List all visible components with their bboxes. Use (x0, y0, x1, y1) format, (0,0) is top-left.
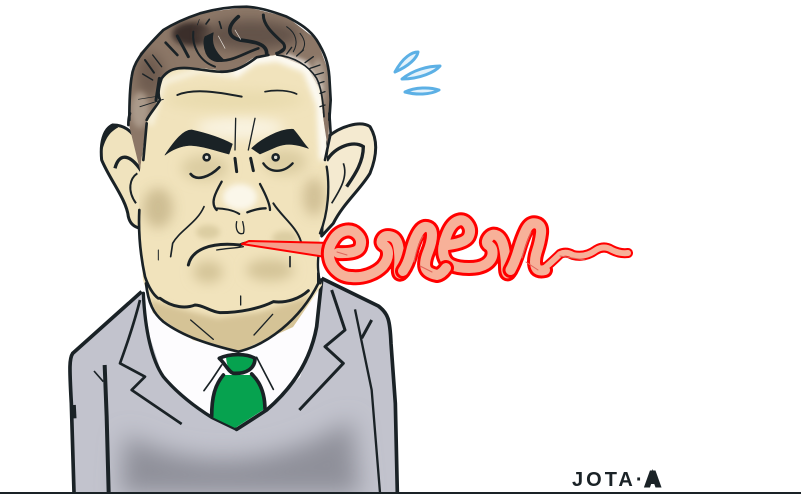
eyebrows (165, 130, 232, 155)
nasolabial (171, 207, 204, 257)
tail fill (540, 248, 628, 272)
signature: JOTA·A (572, 469, 660, 491)
hair side strands (128, 113, 147, 160)
hair line art (129, 7, 331, 120)
glabella lines (233, 118, 238, 150)
first e and first n stem (329, 230, 403, 277)
mouth (188, 242, 287, 265)
second e and second n stem (443, 220, 510, 273)
face outline left and jaw (139, 210, 158, 298)
face outline right (318, 167, 328, 283)
face (139, 55, 330, 356)
shading patches (143, 188, 173, 228)
jaw and neck lines (146, 273, 318, 352)
tail (540, 248, 628, 272)
suit jacket (70, 278, 398, 494)
hair (129, 7, 330, 170)
bottom border line (0, 492, 801, 494)
second n arch (510, 223, 545, 270)
sweat drops (395, 52, 440, 94)
left ear (100, 123, 145, 228)
green tie (212, 353, 265, 428)
neck shadow (150, 296, 310, 356)
ribbon fold marks (337, 232, 585, 272)
eyes (204, 154, 210, 160)
nose (214, 182, 222, 210)
right ear (322, 124, 376, 236)
forehead soft highlight around hairline (150, 70, 233, 125)
forehead lines (177, 91, 242, 97)
first n arch (403, 227, 446, 275)
speech ribbon: enen (242, 220, 628, 277)
white shirt (143, 280, 322, 430)
tongue from the mouth (242, 241, 332, 258)
facial line art (128, 90, 331, 298)
under eyes (191, 167, 219, 178)
